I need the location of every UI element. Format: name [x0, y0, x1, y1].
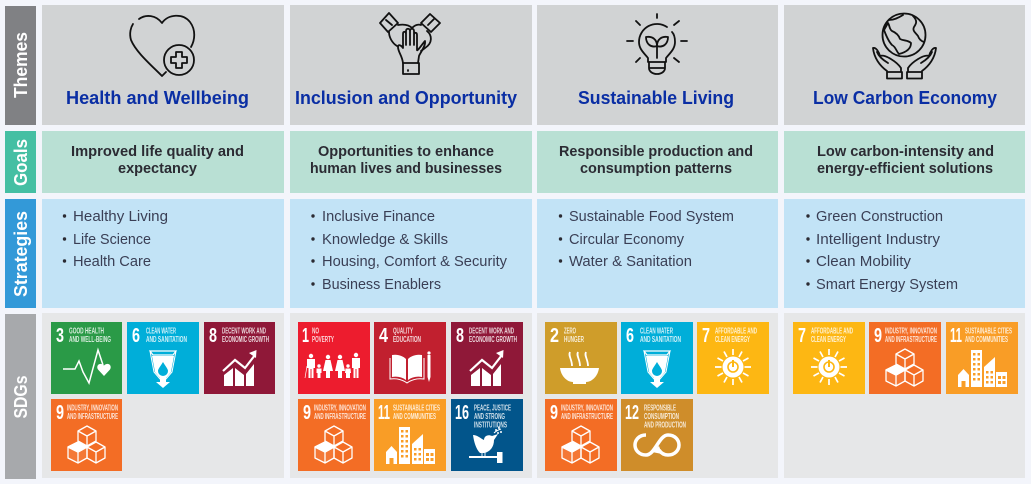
panel: strategies column 4: Smart Energy System [816, 276, 958, 293]
SDG 6 tile: AND SANITATION [640, 335, 681, 344]
panel: strategies column 1: Health Care [73, 253, 151, 270]
SDG 1 tile: NO [312, 326, 319, 336]
SDG 3 tile [51, 322, 122, 394]
SDG 9 tile: AND INFRASTRUCTURE [885, 335, 937, 344]
SDG 6 tile: AND SANITATION [146, 335, 187, 344]
SDG 9 tile: INDUSTRY, INNOVATION [314, 404, 366, 412]
panel: SDGs column 1 [42, 313, 284, 478]
SDG 9 tile: INDUSTRY, INNOVATION [67, 404, 118, 412]
SDG 4 tile: EDUCATION [393, 335, 421, 344]
panel: strategies column 3: Water & Sanitation [569, 253, 692, 270]
SDG 9 tile [298, 399, 370, 471]
panel: goal column 1: Improved life quality and [71, 144, 244, 160]
heading: Low Carbon Economy [813, 88, 997, 108]
SDG 8 tile: ECONOMIC GROWTH [222, 335, 269, 344]
SDG 16 tile: PEACE, JUSTICE [474, 404, 511, 412]
panel: strategies column 1: Healthy Living [73, 208, 168, 225]
SDG 1 tile [298, 322, 370, 394]
panel: theme Low Carbon Economy [784, 5, 1025, 125]
icon: joined hands [380, 13, 440, 74]
panel: strategies column 1 [42, 199, 284, 308]
panel: strategies column 4: Green Construction [816, 208, 943, 225]
SDG 9 tile: AND INFRASTRUCTURE [314, 412, 366, 421]
panel: goal column 2: human lives and businesses [310, 161, 502, 177]
panel: strategies column 2: Inclusive Finance [322, 208, 435, 225]
panel: strategies column 1: Life Science [73, 231, 151, 248]
SDG 6 tile [127, 322, 199, 394]
panel: goal column 4 [784, 131, 1025, 193]
panel: strategies column 3 [537, 199, 778, 308]
heading: Health and Wellbeing [66, 88, 249, 108]
panel: strategies column 2 [290, 199, 532, 308]
panel: goal column 2 [290, 131, 532, 193]
SDG 3 tile: GOOD HEALTH [69, 326, 104, 336]
SDG 7 tile: CLEAN ENERGY [715, 335, 750, 344]
SDG 12 tile: 12 [625, 402, 639, 424]
panel: strategies column 4: Clean Mobility [816, 253, 911, 270]
panel: strategies column 3: Circular Economy [569, 231, 684, 248]
heading: Sustainable Living [578, 88, 734, 108]
icon: heart with medical cross [130, 16, 194, 76]
SDG 9 tile: 9 [874, 325, 882, 347]
SDG 7 tile: 7 [702, 325, 710, 347]
panel: strategies column 4: Intelligent Industry [816, 231, 940, 248]
panel: goal column 1: expectancy [118, 161, 197, 177]
icon: hands holding globe [873, 14, 936, 78]
SDG 8 tile: 8 [209, 325, 217, 347]
panel: theme Health and Wellbeing [42, 5, 284, 125]
SDG 11 tile: AND COMMUNITIES [393, 412, 436, 421]
row label: Strategies [5, 199, 36, 308]
row label: Strategies: Strategies [11, 211, 31, 297]
SDG 4 tile [374, 322, 446, 394]
panel: strategies column 4 [784, 199, 1025, 308]
SDG 6 tile: CLEAN WATER [146, 326, 176, 336]
SDG 8 tile [204, 322, 275, 394]
SDG 7 tile: 7 [798, 325, 806, 347]
panel: goal column 1 [42, 131, 284, 193]
SDG 8 tile [451, 322, 523, 394]
SDG 6 tile: CLEAN WATER [640, 326, 673, 336]
SDG 9 tile: 9 [550, 402, 558, 424]
panel: theme Inclusion and Opportunity [290, 5, 532, 125]
SDG 6 tile: 6 [626, 325, 634, 347]
SDG 11 tile: 11 [378, 402, 390, 424]
SDG 1 tile: 1 [302, 325, 309, 347]
SDG 8 tile: DECENT WORK AND [222, 326, 266, 336]
SDG 11 tile [946, 322, 1018, 394]
SDG 12 tile [621, 399, 693, 471]
SDG 1 tile: POVERTY [312, 335, 334, 344]
panel: goal column 2: Opportunities to enhance [318, 144, 494, 160]
row label: SDGs: SDGs [11, 376, 31, 418]
panel: strategies column 2: Knowledge & Skills [322, 231, 448, 248]
SDG 9 tile: 9 [303, 402, 311, 424]
SDG 16 tile [451, 399, 523, 471]
SDG 2 tile [545, 322, 617, 394]
row label: Goals [5, 131, 36, 193]
SDG 9 tile: AND INFRASTRUCTURE [67, 412, 118, 421]
SDG 9 tile: INDUSTRY, INNOVATION [561, 404, 613, 412]
SDG 8 tile: 8 [456, 325, 464, 347]
SDG 11 tile [374, 399, 446, 471]
row label: Themes [5, 6, 36, 125]
SDG 12 tile: RESPONSIBLE [644, 404, 676, 412]
SDG 16 tile: AND STRONG [474, 412, 505, 421]
SDG 3 tile: 3 [56, 325, 64, 347]
SDG 16 tile: INSTITUTIONS [474, 421, 507, 430]
SDG 9 tile: 9 [56, 402, 64, 424]
SDG 8 tile: DECENT WORK AND [469, 326, 514, 336]
SDG 16 tile: 16 [455, 402, 469, 424]
panel: goal column 3: Responsible production and [559, 144, 753, 160]
panel: goal column 4: energy-efficient solutions [817, 161, 993, 177]
panel: goal column 3: consumption patterns [580, 161, 732, 177]
SDG 7 tile [697, 322, 769, 394]
panel: SDGs column 4 [784, 313, 1025, 478]
SDG 4 tile: 4 [379, 325, 389, 347]
row label: SDGs [5, 314, 36, 479]
SDG 11 tile: SUSTAINABLE CITIES [393, 404, 440, 412]
SDG 12 tile: AND PRODUCTION [644, 421, 686, 430]
panel: strategies column 2: Housing, Comfort & Security [322, 253, 507, 270]
SDG 9 tile [51, 399, 122, 471]
SDG 2 tile: HUNGER [564, 335, 584, 344]
icon: light bulb with sprout [627, 14, 687, 74]
panel: SDGs column 3 [537, 313, 778, 478]
SDG 3 tile: AND WELL-BEING [69, 335, 111, 344]
panel: goal column 3 [537, 131, 778, 193]
SDG 7 tile: AFFORDABLE AND [811, 326, 853, 336]
SDG 2 tile: ZERO [564, 326, 576, 336]
SDG 2 tile: 2 [550, 325, 559, 347]
SDG 8 tile: ECONOMIC GROWTH [469, 335, 517, 344]
SDG 9 tile: INDUSTRY, INNOVATION [885, 326, 937, 336]
SDG 6 tile [621, 322, 693, 394]
SDG 12 tile: CONSUMPTION [644, 412, 679, 421]
SDG 7 tile: AFFORDABLE AND [715, 326, 757, 336]
panel: goal column 4: Low carbon-intensity and [817, 144, 994, 160]
heading: Inclusion and Opportunity [295, 88, 517, 108]
panel: theme Sustainable Living [537, 5, 778, 125]
SDG 6 tile: 6 [132, 325, 140, 347]
row label: Themes: Themes [11, 32, 31, 98]
SDG 4 tile: QUALITY [393, 326, 413, 336]
SDG 9 tile [869, 322, 941, 394]
SDG 9 tile: AND INFRASTRUCTURE [561, 412, 613, 421]
SDG 7 tile: CLEAN ENERGY [811, 335, 846, 344]
SDG 9 tile [545, 399, 617, 471]
SDG 11 tile: 11 [950, 325, 962, 347]
panel: strategies column 3: Sustainable Food System [569, 208, 734, 225]
SDG 7 tile [793, 322, 865, 394]
panel: strategies column 2: Business Enablers [322, 276, 441, 293]
panel: SDGs column 2 [290, 313, 532, 478]
row label: Goals: Goals [11, 139, 31, 186]
